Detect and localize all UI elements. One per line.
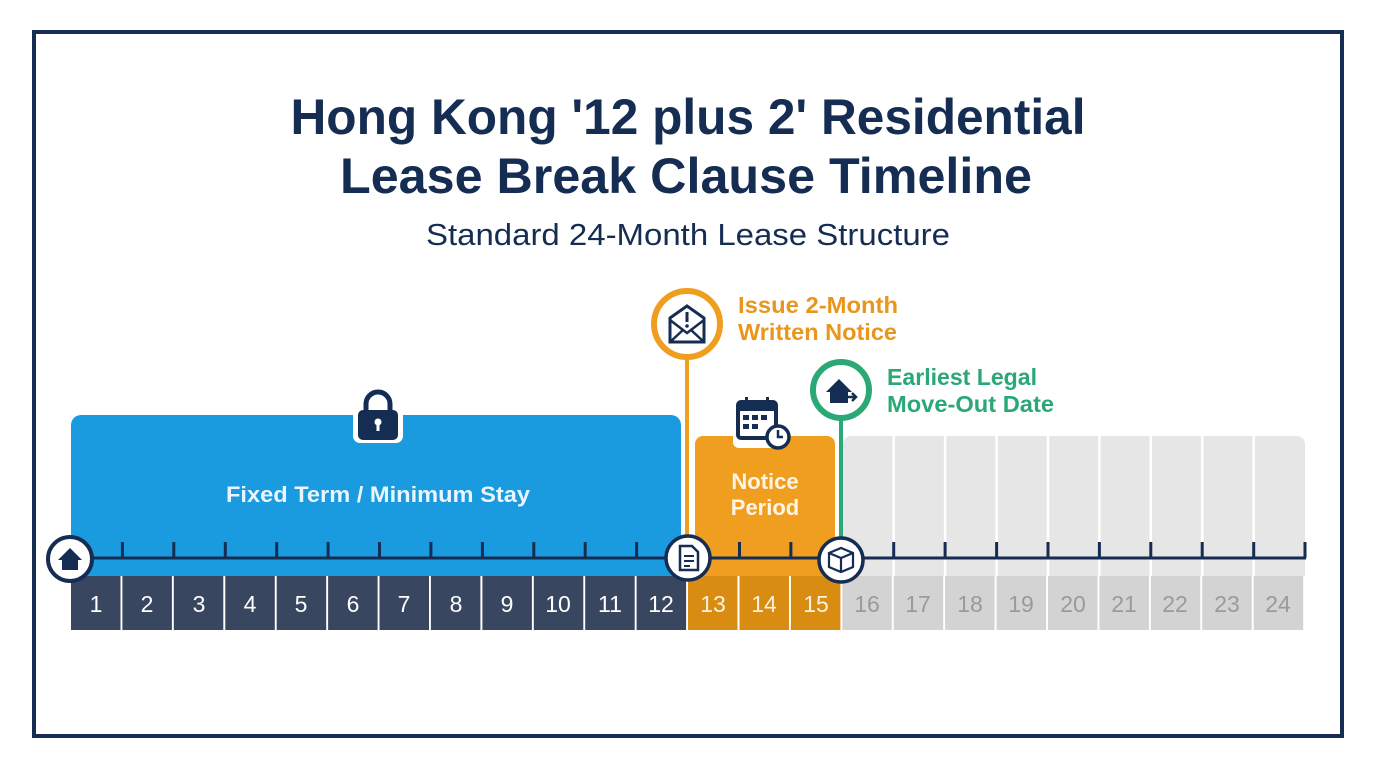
icon: calendar clock xyxy=(733,396,789,448)
month cells: 19 xyxy=(1008,591,1034,617)
month cells: 22 xyxy=(1162,591,1188,617)
month cells: 6 xyxy=(347,591,359,617)
panel: remaining months xyxy=(843,436,1305,576)
title: Lease Break Clause Timeline xyxy=(340,148,1032,204)
panel: notice period: Period xyxy=(731,495,799,520)
month cells: 12 xyxy=(648,591,674,617)
month cells: 23 xyxy=(1214,591,1240,617)
title xyxy=(290,89,1086,204)
timeline axis xyxy=(70,542,1306,558)
marker: move-out date: Earliest Legal xyxy=(887,364,1037,390)
month cells: 9 xyxy=(501,591,513,617)
month cells: 21 xyxy=(1111,591,1137,617)
icon: home start xyxy=(48,537,92,581)
month cells: 13 xyxy=(700,591,726,617)
subtitle: Standard 24-Month Lease Structure xyxy=(426,217,950,252)
panel: fixed term: Fixed Term / Minimum Stay xyxy=(226,482,531,507)
month cells: 7 xyxy=(398,591,410,617)
marker: move-out date xyxy=(813,362,1054,540)
icon: lock xyxy=(353,392,403,443)
month cells: 14 xyxy=(751,591,777,617)
month cells: 15 xyxy=(803,591,829,617)
month cells: 17 xyxy=(905,591,931,617)
month cells: 18 xyxy=(957,591,983,617)
icon: document xyxy=(666,536,710,580)
panel: notice period: Notice xyxy=(731,469,799,494)
marker: move-out date: Move-Out Date xyxy=(887,391,1054,417)
month cells: 3 xyxy=(193,591,205,617)
month cells: 10 xyxy=(545,591,571,617)
marker: issue notice xyxy=(654,291,898,545)
month cells: 1 xyxy=(90,591,102,617)
month cells: 5 xyxy=(295,591,307,617)
title: Hong Kong '12 plus 2' Residential xyxy=(290,89,1086,145)
panel: notice period xyxy=(695,436,835,576)
month cells: 20 xyxy=(1060,591,1086,617)
marker: issue notice: Issue 2-Month xyxy=(738,292,898,318)
month cells: 11 xyxy=(598,591,622,617)
month cells: 24 xyxy=(1265,591,1291,617)
month cells: 2 xyxy=(141,591,153,617)
marker: issue notice: Written Notice xyxy=(738,319,897,345)
icon: box xyxy=(819,538,863,582)
month cells xyxy=(71,576,1303,630)
month cells: 8 xyxy=(450,591,462,617)
month cells: 4 xyxy=(244,591,257,617)
panel: fixed term xyxy=(71,415,681,576)
month cells: 16 xyxy=(854,591,880,617)
